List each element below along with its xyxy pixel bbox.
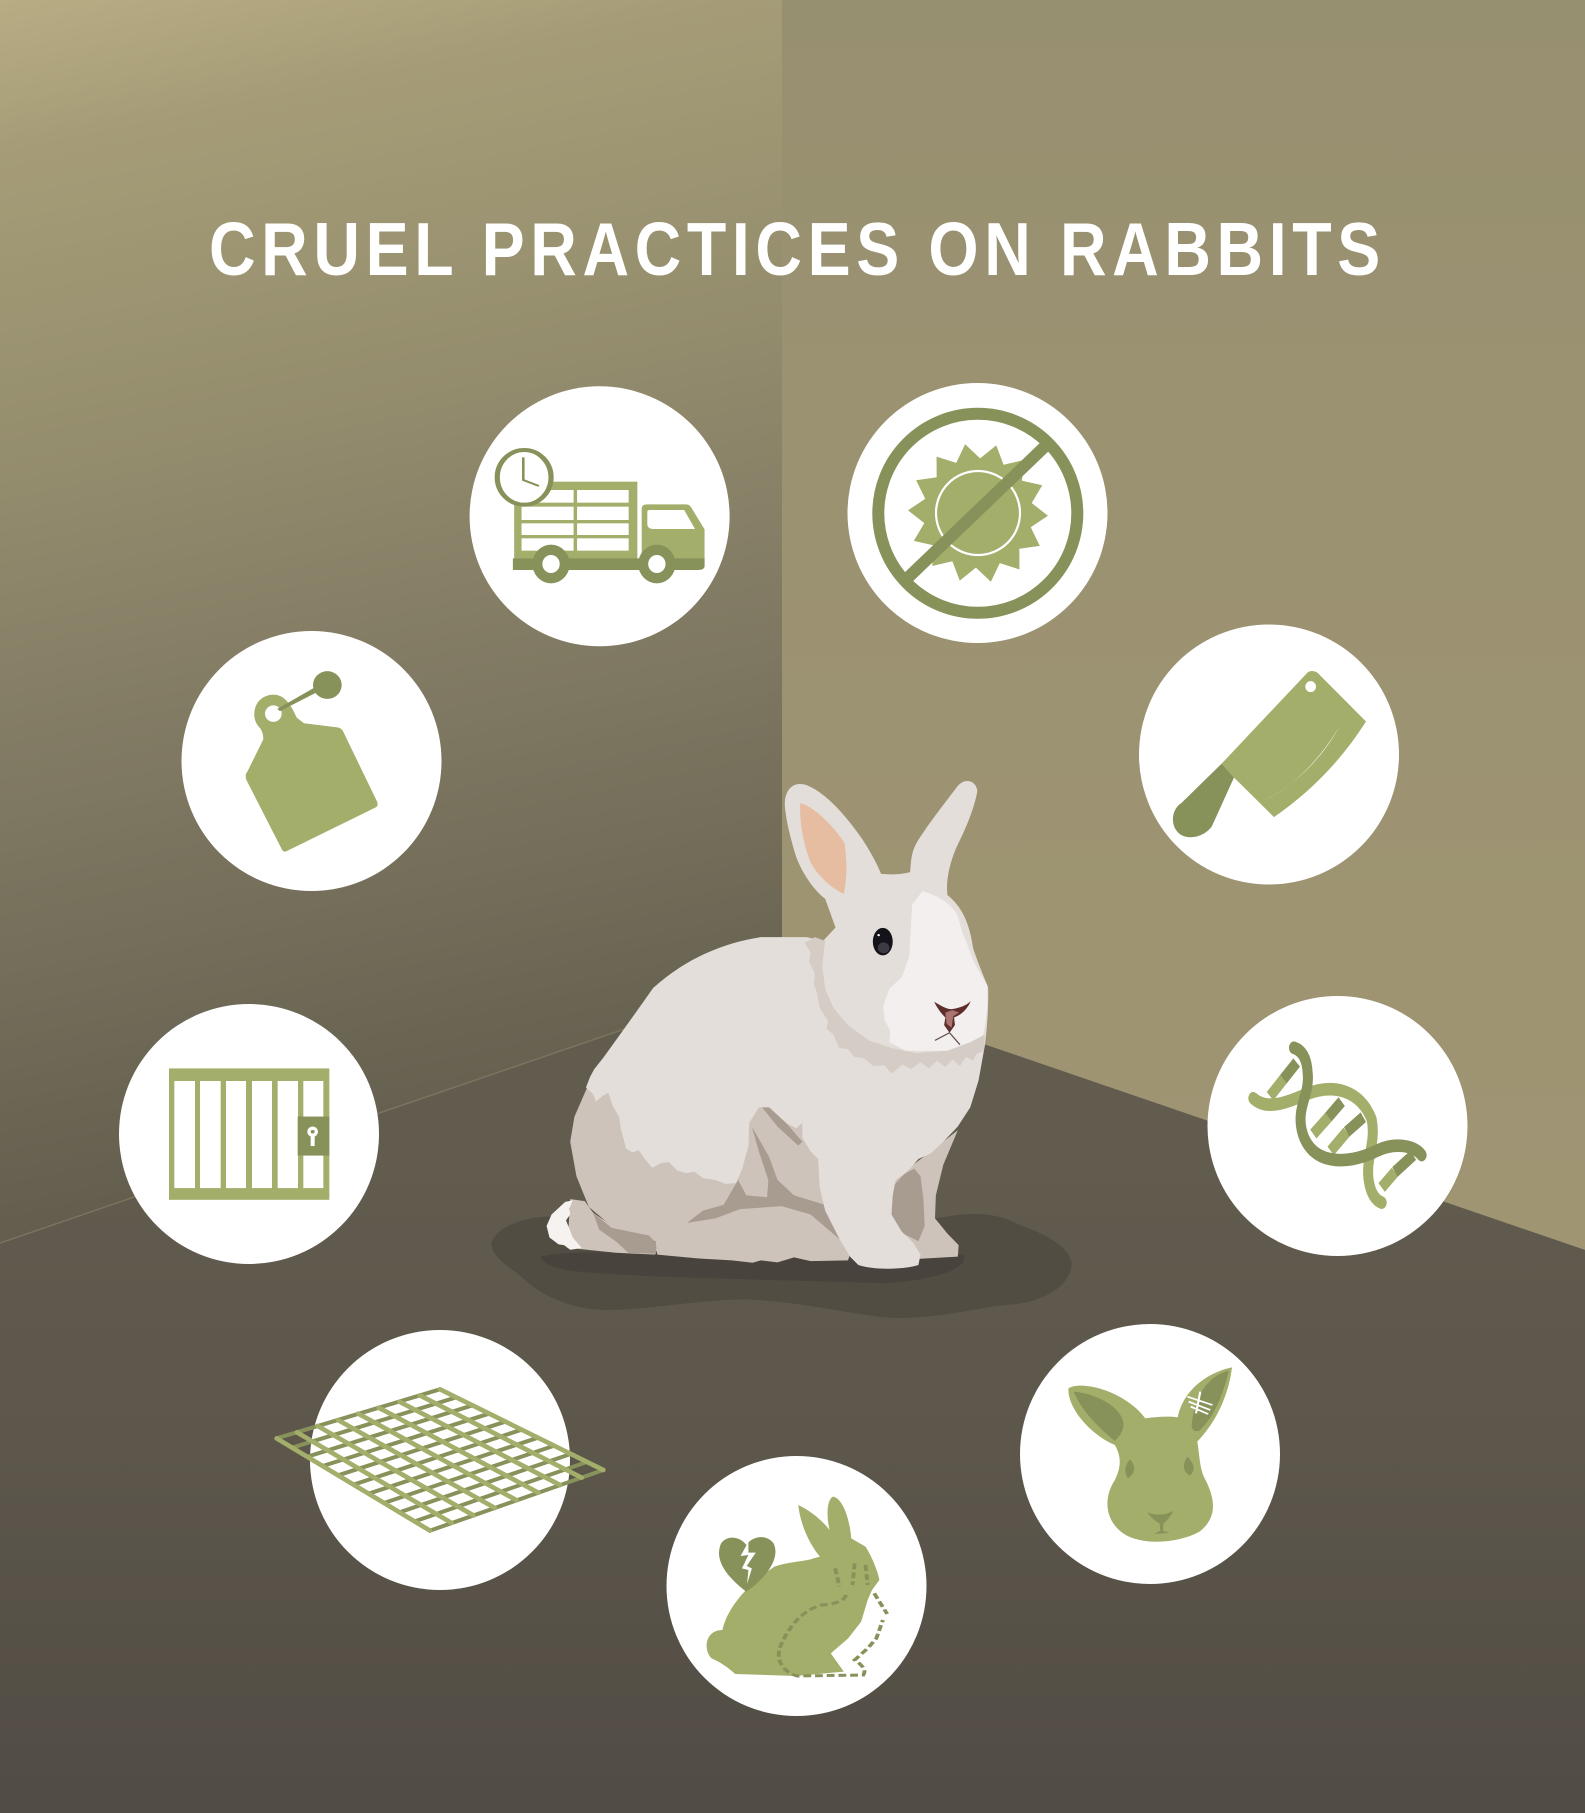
tag pin (277, 671, 342, 711)
icon: rabbit head with ear notch (1020, 1324, 1280, 1584)
rabbit inner ear (800, 803, 846, 894)
cleaver blade (1222, 671, 1366, 817)
blade highlight (1265, 726, 1340, 800)
rabbit tail (547, 1199, 657, 1255)
tag body (246, 695, 378, 852)
icon: no sunlight (848, 383, 1108, 643)
floor (0, 975, 1585, 1813)
cleaver hole (1305, 681, 1316, 692)
rabbit shaded folds (593, 1044, 925, 1254)
mesh wires up-right (277, 1389, 603, 1531)
rabbit nose and mouth (934, 1001, 971, 1045)
DNA dark strand (1294, 1048, 1422, 1160)
sun rays (907, 441, 1049, 585)
tag hole (265, 705, 282, 722)
sun core (936, 471, 1020, 555)
rabbit floor shadow (491, 1214, 1072, 1318)
cage frame and bars (169, 1068, 329, 1200)
rabbit face white patch (883, 891, 987, 1051)
rabbit illustration (491, 781, 1072, 1318)
broken heart (719, 1537, 775, 1592)
DNA rungs (1270, 1062, 1413, 1188)
icon: wire mesh floor (277, 1330, 603, 1590)
title: CRUEL PRACTICES ON RABBITS (209, 207, 1380, 291)
dashed outline (779, 1563, 887, 1676)
truck chassis (513, 558, 705, 570)
rabbit contact shadow (541, 1252, 964, 1283)
icon: cleaver (1139, 624, 1399, 884)
mesh wires down-right (277, 1389, 603, 1531)
prohibition ring and slash (878, 414, 1077, 613)
truck cab (637, 504, 705, 567)
rabbit silhouette (707, 1497, 879, 1676)
icon: transport truck with clock (470, 386, 730, 646)
truck wheels (532, 545, 676, 583)
ear scars (1187, 1392, 1212, 1414)
icon: ear tag (182, 631, 442, 891)
rear paw (894, 1130, 959, 1259)
rabbit main body and head (586, 781, 988, 1269)
rabbit eye (873, 928, 893, 955)
DNA light strand (1253, 1089, 1382, 1203)
icon: cage (119, 1004, 379, 1264)
rabbit head (1068, 1367, 1232, 1542)
truck cargo frame (514, 482, 637, 562)
left wall (0, 0, 782, 1243)
icon: DNA helix (1208, 996, 1468, 1256)
icon: rabbit with broken heart (666, 1456, 926, 1716)
inner ears, eyes and nose (1074, 1371, 1229, 1534)
rabbit lower body (570, 1065, 869, 1263)
clock (497, 450, 551, 505)
rabbit fur collar (804, 937, 985, 1074)
cleaver handle (1173, 764, 1234, 837)
right wall (782, 0, 1585, 1250)
cage lock (298, 1117, 329, 1156)
